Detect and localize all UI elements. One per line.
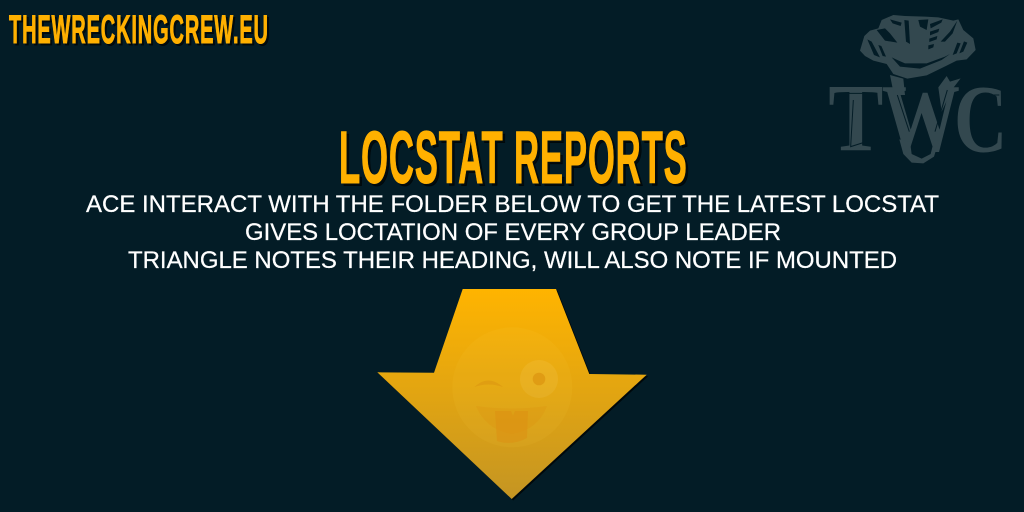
- title: LOCSTAT REPORTS: [339, 118, 687, 200]
- icon: snake head markings: [867, 19, 967, 69]
- arrow pointing down: [377, 289, 648, 500]
- logo letter inlines: [837, 90, 999, 147]
- site name: THEWRECKINGCREW.EU: [9, 6, 268, 52]
- icon: snake neck right: [938, 76, 961, 112]
- logo: TWC snake: [828, 15, 1007, 173]
- description text: TRIANGLE NOTES THEIR HEADING, WILL ALSO NOTE IF MOUNTED: [128, 247, 897, 274]
- logo letters: C: [954, 66, 1007, 173]
- description text: GIVES LOCTATION OF EVERY GROUP LEADER: [245, 219, 781, 246]
- logo letters: W: [882, 65, 960, 172]
- logo letters: [828, 64, 1007, 173]
- logo letters: T: [828, 64, 883, 171]
- icon: snake head: [860, 15, 976, 79]
- icon: snake neck left: [890, 75, 905, 95]
- description text: [86, 191, 939, 274]
- icon: winking emoji: [452, 327, 572, 447]
- site name: THEWRECKINGCREW.EU: [11, 8, 270, 54]
- title: LOCSTAT REPORTS: [342, 120, 689, 202]
- description text: ACE INTERACT WITH THE FOLDER BELOW TO GET THE LATEST LOCSTAT: [86, 191, 939, 218]
- icon: snake tail: [899, 139, 939, 163]
